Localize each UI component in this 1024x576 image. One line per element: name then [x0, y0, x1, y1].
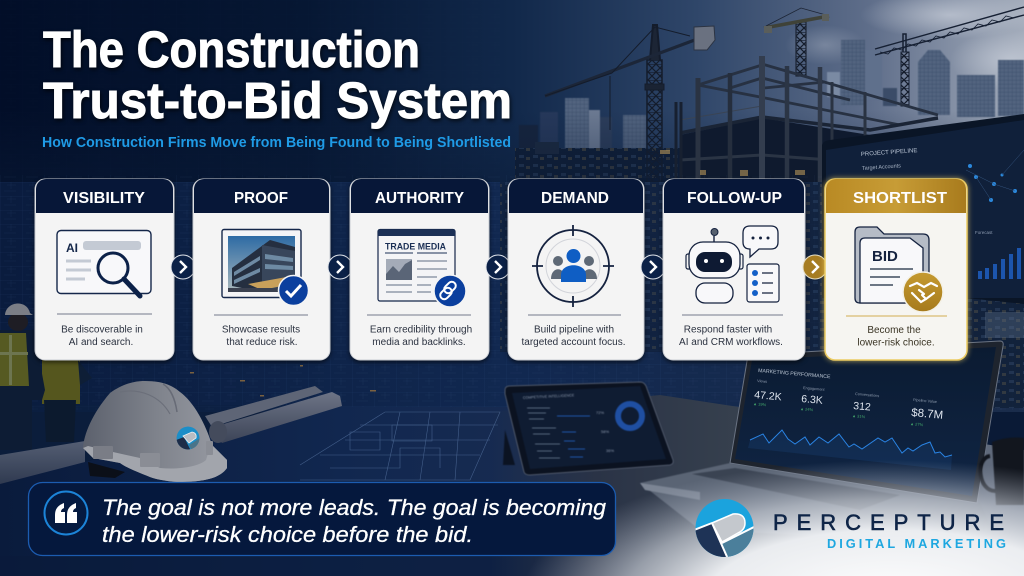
arrow [486, 255, 510, 279]
laptop dashboard text: Views [757, 379, 767, 384]
logo: Percepture Digital Marketing [694, 499, 1006, 560]
coffee mug [980, 438, 1024, 505]
low city block [515, 148, 680, 182]
panel: demand card [508, 179, 644, 360]
demand description: Build pipeline with [534, 324, 614, 336]
demand description: targeted account focus. [522, 337, 625, 348]
icon: trade media page with link: TRADE MEDIA [385, 242, 446, 252]
demand header [509, 179, 643, 213]
wordmark: PERCEPTURE [773, 510, 1004, 535]
forecast bars [978, 248, 1021, 279]
proof header [194, 179, 329, 213]
quote text: The goal is not more leads. The goal is becoming [102, 495, 607, 520]
laptop dashboard text: 312 [853, 400, 871, 414]
tablet: COMPETITIVE INTELLIGENCE [523, 393, 575, 400]
follow-up description [679, 324, 783, 348]
shortlist description [857, 325, 935, 348]
visibility header [36, 179, 173, 213]
tablet [503, 382, 673, 475]
desk surface [490, 395, 1024, 576]
panel: authority card [350, 179, 489, 360]
shortlist header: SHORTLIST [853, 190, 948, 207]
panel: dashboard monitor: PROJECT PIPELINE [861, 148, 918, 158]
panel: follow-up card [663, 179, 805, 360]
proof description: that reduce risk. [226, 337, 298, 348]
orange speck lights [150, 365, 376, 396]
hat logo [176, 426, 200, 450]
panel: shortlist card [825, 179, 967, 360]
worker front [0, 303, 45, 450]
laptop dashboard text: MARKETING PERFORMANCE [758, 368, 831, 380]
authority description [370, 324, 472, 348]
laptop dashboard text: ▲ 24% [800, 406, 814, 412]
skyline towers [519, 40, 1024, 180]
laptop dashboard text: Engagement [803, 386, 826, 392]
crane one [545, 25, 715, 182]
steel frame [660, 56, 938, 182]
laptop dashboard text: Conversations [855, 392, 880, 398]
icon: AI search window [57, 230, 151, 296]
laptop dashboard text: $8.7M [911, 407, 944, 422]
table surface with blueprint [0, 405, 620, 576]
arrow [328, 255, 352, 279]
worker back [42, 360, 92, 442]
tablet percentages: 36% [606, 448, 614, 453]
blueprint rolls [0, 386, 342, 484]
laptop [640, 341, 1003, 545]
visibility description: AI and search. [69, 337, 133, 348]
quote text [102, 495, 607, 547]
tablet percentages: 58% [601, 429, 609, 434]
shortlist description: Become the [867, 325, 921, 336]
tagline: DIGITAL MARKETING [827, 536, 1006, 551]
panel: dashboard monitor: Forecast [975, 230, 993, 235]
arrow [171, 255, 195, 279]
arrow [641, 255, 665, 279]
title: The Construction [43, 21, 420, 78]
panel: proof card [193, 179, 330, 360]
tablet percentages: 72% [596, 410, 604, 415]
follow-up description: AI and CRM workflows. [679, 337, 783, 348]
visibility description: Be discoverable in [61, 324, 143, 336]
quote text: the lower-risk choice before the bid. [102, 522, 473, 547]
subtitle: How Construction Firms Move from Being Found to Being Shortlisted [42, 135, 511, 151]
shortlist header [826, 179, 966, 213]
mid band city grid [0, 182, 1024, 412]
follow-up header: FOLLOW-UP [687, 190, 782, 207]
logo mark [696, 499, 754, 557]
callout: quote box [28, 482, 616, 556]
panel: dashboard monitor [822, 114, 1024, 304]
crane two [764, 8, 829, 76]
authority header [351, 179, 488, 213]
icon: bid folder with handshake: BID [872, 248, 898, 265]
panel: visibility card [35, 179, 174, 360]
hard hat with logo [83, 381, 227, 482]
follow-up header [664, 179, 804, 213]
authority description: Earn credibility through [370, 324, 472, 336]
tablet donut [618, 404, 642, 428]
visibility header: VISIBILITY [63, 190, 146, 207]
visibility description [61, 324, 143, 348]
authority description: media and backlinks. [372, 337, 466, 348]
laptop dashboard text [753, 368, 944, 427]
authority header: AUTHORITY [375, 190, 465, 207]
proof description: Showcase results [222, 324, 300, 336]
demand header: DEMAND [541, 190, 609, 207]
icon: chatbot [686, 226, 779, 303]
icon: bid folder with handshake [855, 227, 943, 312]
proof description [222, 324, 300, 348]
icon: AI search window: AI [66, 241, 78, 255]
laptop base [640, 463, 1000, 545]
panel: dashboard monitor: Target Accounts [862, 163, 901, 172]
laptop dashboard text: ▲ 31% [852, 413, 866, 419]
laptop line chart [748, 430, 952, 470]
laptop dashboard text: ▲ 19% [753, 401, 767, 407]
crane three [875, 7, 1024, 106]
follow-up description: Respond faster with [684, 324, 772, 336]
shortlist description: lower-risk choice. [857, 338, 935, 348]
title [43, 21, 512, 129]
proof header: PROOF [234, 190, 288, 207]
laptop dashboard text: Pipeline Value [913, 398, 937, 404]
tablet percentages [596, 410, 614, 453]
icon: building photo with check [222, 230, 308, 306]
laptop dashboard text: 47.2K [754, 389, 782, 403]
worker silhouettes [0, 303, 92, 450]
laptop dashboard text: ▲ 27% [910, 421, 924, 427]
demand description [522, 324, 625, 348]
icon: trade media page with link [378, 230, 466, 307]
laptop dashboard text: 6.3K [801, 393, 823, 407]
icon: quotation mark [44, 492, 88, 534]
arrow [803, 255, 827, 279]
icon: target audience [532, 225, 614, 307]
white corner glow [500, 440, 1024, 576]
title: Trust-to-Bid System [43, 72, 512, 129]
